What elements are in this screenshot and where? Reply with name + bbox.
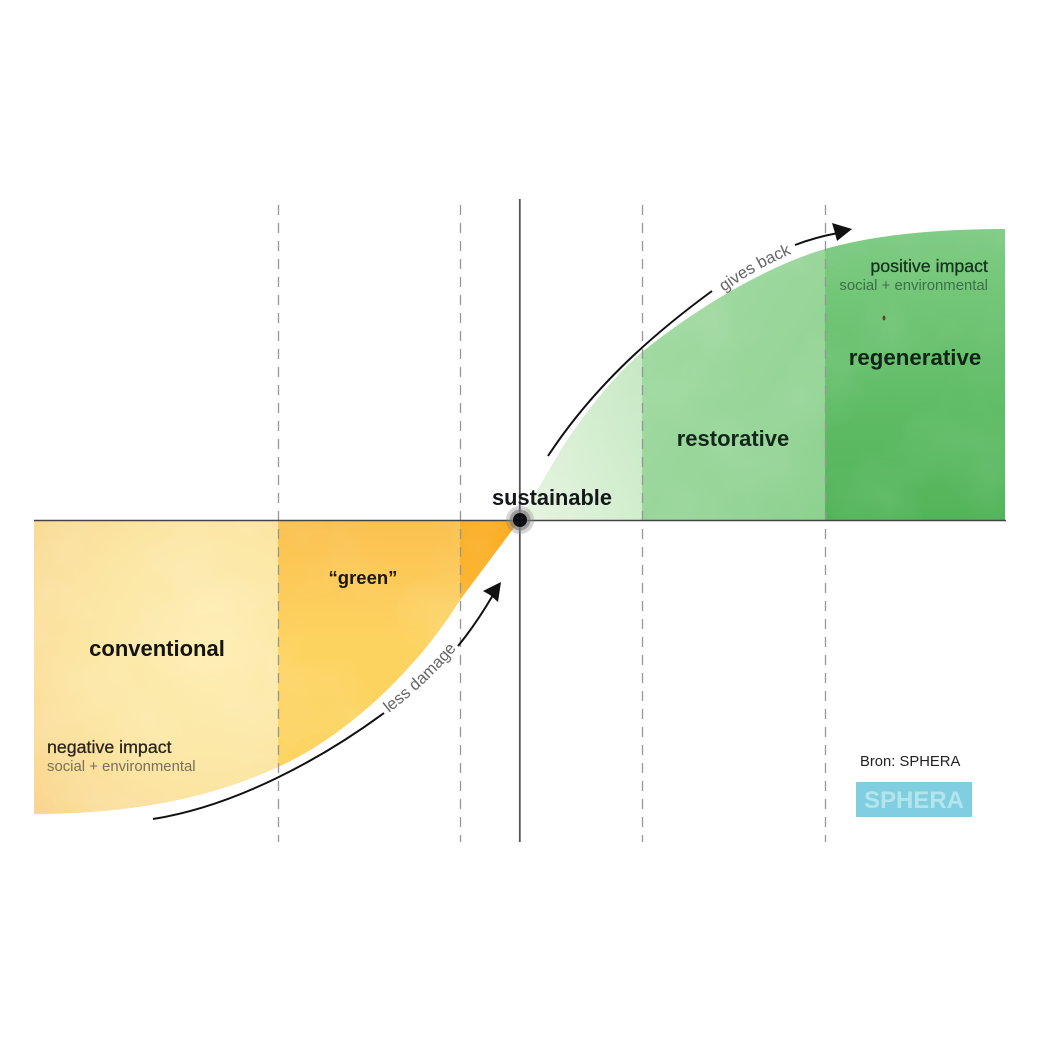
panel: positive impact area	[519, 229, 1005, 521]
infographic: regenerative sustainability curve	[34, 199, 1006, 842]
text block: negative impact	[47, 737, 196, 775]
horizontal axis	[34, 520, 1006, 522]
arrow: gives back	[547, 223, 852, 456]
label: conventional: conventional	[89, 636, 225, 661]
text block: positive impact	[839, 256, 988, 294]
text block: negative impact: social + environmental	[47, 759, 196, 775]
vertical axis	[519, 199, 521, 842]
logo: SPHERA	[856, 782, 972, 817]
label: green: “green”	[329, 567, 397, 588]
marker: sustainable point	[506, 506, 534, 534]
text block: positive impact: social + environmental	[839, 278, 988, 294]
label: sustainable: sustainable	[492, 485, 612, 510]
text block: positive impact: positive impact	[870, 256, 988, 276]
arrow: gives back: gives back	[720, 245, 792, 293]
arrow: less damage	[152, 582, 501, 820]
logo: SPHERA: SPHERA	[864, 787, 964, 814]
panel: negative impact area	[34, 521, 520, 816]
speck	[882, 316, 886, 320]
label: restorative: restorative	[677, 426, 789, 451]
text block: negative impact: negative impact	[47, 737, 172, 757]
arrow: less damage: less damage	[382, 645, 455, 712]
label: regenerative: regenerative	[849, 345, 981, 370]
source credit: Bron: SPHERA	[860, 754, 960, 770]
